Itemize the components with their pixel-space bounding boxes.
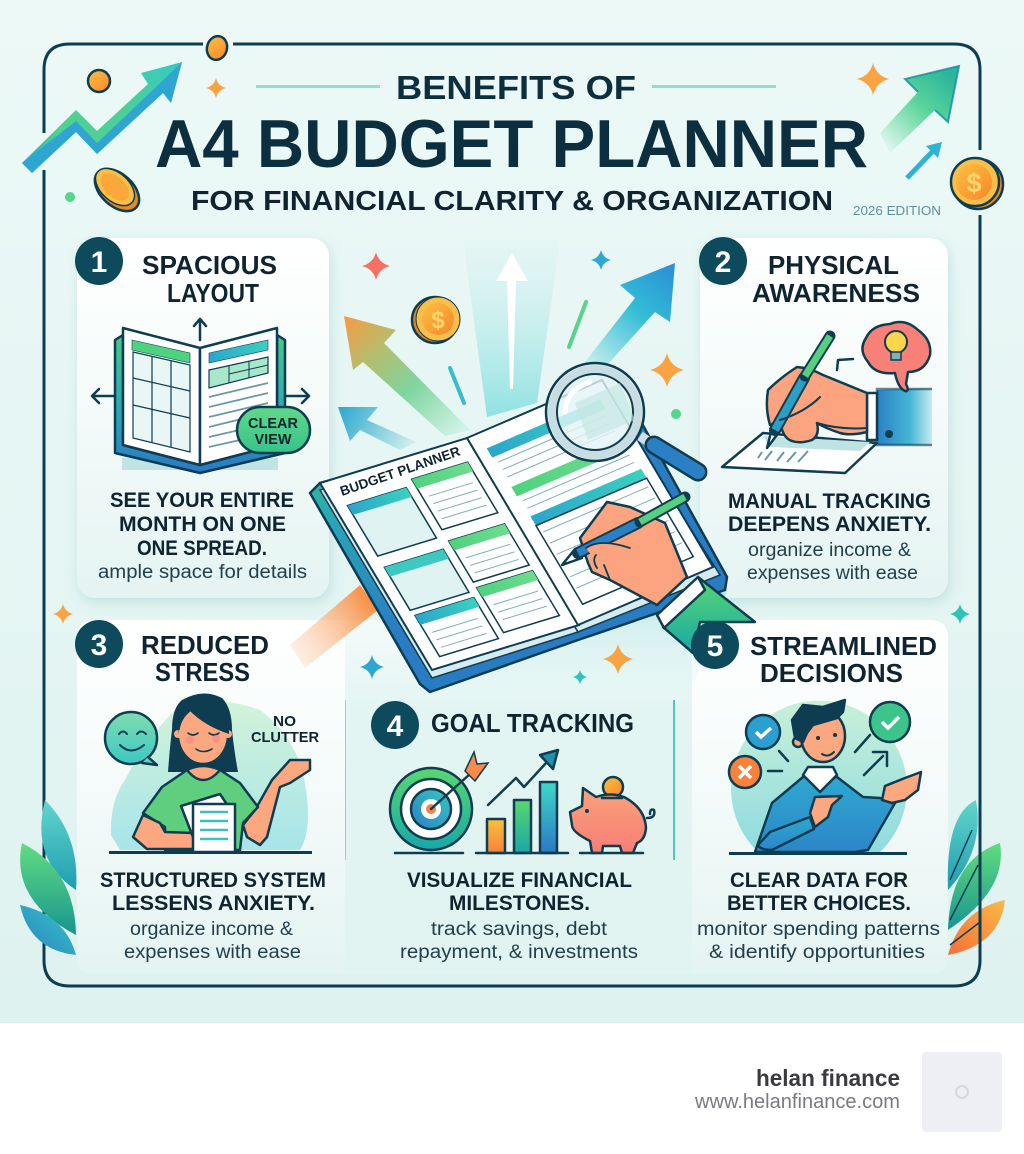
arm left (133, 815, 213, 849)
arm right (243, 760, 310, 845)
arrow: white up (496, 253, 528, 389)
body text: organize income & (748, 540, 911, 561)
book shadow (430, 590, 727, 700)
badge 5: 5 (707, 630, 723, 663)
footer band (0, 1023, 1024, 1154)
badge 3: 3 (91, 629, 107, 662)
body text: ample space for details (98, 562, 307, 583)
subtitle: FOR FINANCIAL CLARITY & ORGANIZATION (191, 185, 833, 216)
badge 4: 4 (387, 710, 404, 743)
outer frame (44, 44, 980, 986)
icon: coin: $ (431, 307, 445, 334)
heading: STRESS (155, 657, 250, 687)
heading (750, 631, 937, 688)
arm pointing (758, 817, 814, 850)
arrow: blue up right (585, 263, 675, 364)
icon: cross orange (729, 756, 761, 788)
icon: target (390, 752, 488, 853)
badge 2 (699, 237, 747, 285)
badge 1 (75, 237, 123, 285)
body text (728, 490, 931, 584)
panel: 3 reduced stress (75, 620, 345, 974)
label: no clutter (251, 713, 319, 746)
body text: MILESTONES. (449, 892, 590, 915)
icon: magnifying glass (546, 363, 698, 472)
icon: small coins top left (65, 34, 230, 219)
title line 1: BENEFITS OF (396, 69, 636, 106)
brand name: helan finance (756, 1065, 900, 1091)
body text: VISUALIZE FINANCIAL (407, 869, 632, 892)
heading: GOAL TRACKING (431, 708, 634, 738)
icon: hand writing (562, 497, 755, 653)
badge 5 (691, 621, 739, 669)
badge 2: 2 (715, 246, 731, 279)
decoration: leaves left (20, 800, 76, 955)
icon: coin (412, 297, 460, 343)
edition tag: 2026 EDITION (853, 204, 941, 218)
body text: MONTH ON ONE (119, 513, 286, 536)
body text: DEEPENS ANXIETY. (728, 513, 931, 536)
icon: open book (92, 319, 310, 473)
decoration: leaves right (948, 800, 1005, 960)
shirt (143, 770, 258, 850)
logo tile (922, 1052, 1002, 1132)
body text: SEE YOUR ENTIRE (110, 489, 294, 512)
icon: top right arrows, star, coin (857, 63, 1003, 209)
icon: man deciding (729, 700, 921, 855)
body text (697, 869, 940, 963)
body text: expenses with ease (124, 942, 301, 963)
panel: 2 physical awareness (699, 237, 948, 598)
panel: 4 goal tracking (345, 620, 692, 974)
footer brand (694, 1052, 1002, 1132)
title accent right (652, 85, 776, 88)
heading: AWARENESS (752, 278, 920, 308)
arrow: orange lower left (290, 585, 378, 668)
label: no clutter: CLUTTER (251, 729, 319, 746)
icon: brain and bulb (862, 322, 930, 391)
heading on page: BUDGET PLANNER (338, 444, 462, 499)
badge 4 (371, 701, 419, 749)
left page (320, 438, 579, 670)
arrows (92, 319, 309, 403)
badge: clear view: CLEAR (248, 416, 298, 432)
body text (400, 869, 638, 963)
title line 2: A4 BUDGET PLANNER (155, 106, 868, 182)
sparkle stars (53, 250, 970, 684)
body text: monitor spending patterns (697, 919, 940, 940)
icon: top right arrows, star, coin: $ (966, 168, 982, 198)
heading: SPACIOUS (142, 250, 277, 280)
label: no clutter: NO (273, 713, 296, 730)
icon: rising arrow top left (22, 62, 182, 173)
heading (752, 250, 920, 308)
body text: STRUCTURED SYSTEM (100, 869, 326, 892)
body text (100, 869, 326, 963)
icon: check green (870, 702, 910, 742)
icon: piggy bank (570, 777, 654, 853)
title block (155, 69, 941, 218)
panel: 1 spacious layout (75, 237, 329, 598)
central open planner (310, 363, 755, 692)
heading: LAYOUT (167, 278, 259, 308)
title accent left (256, 85, 380, 88)
cover (310, 420, 727, 692)
body text: LESSENS ANXIETY. (112, 892, 315, 915)
badge 1: 1 (91, 246, 107, 279)
body text: & identify opportunities (709, 942, 925, 963)
icon: smile bubble (105, 712, 157, 765)
arrow: blue up left (338, 407, 416, 450)
body text: ONE SPREAD. (137, 537, 267, 560)
body text: repayment, & investments (400, 942, 638, 963)
heading: REDUCED (141, 630, 269, 660)
arrow: orange up left (344, 316, 470, 436)
icon: calm woman with papers (105, 693, 319, 854)
heading (142, 250, 277, 308)
badge: clear view: VIEW (254, 432, 292, 448)
website: www.helanfinance.com (694, 1091, 900, 1113)
central burst of arrows (338, 240, 675, 450)
body text (98, 489, 307, 583)
chart: growth bars (476, 750, 568, 853)
heading: DECISIONS (760, 658, 903, 688)
body text: BETTER CHOICES. (727, 892, 911, 915)
body text: expenses with ease (747, 563, 918, 584)
body text: organize income & (130, 919, 293, 940)
icon: check blue (746, 715, 780, 749)
panel: 5 streamlined decisions (692, 620, 948, 974)
body text: track savings, debt (431, 919, 608, 940)
badge 3 (75, 620, 123, 668)
badge: clear view (237, 407, 310, 453)
body text: CLEAR DATA FOR (730, 869, 908, 892)
heading: STREAMLINED (750, 631, 937, 661)
heading (141, 630, 269, 687)
tick marks (569, 302, 586, 347)
icon: hand writing with brain (722, 322, 932, 473)
body text: MANUAL TRACKING (728, 490, 931, 513)
heading: PHYSICAL (768, 250, 899, 280)
right page (467, 380, 713, 625)
